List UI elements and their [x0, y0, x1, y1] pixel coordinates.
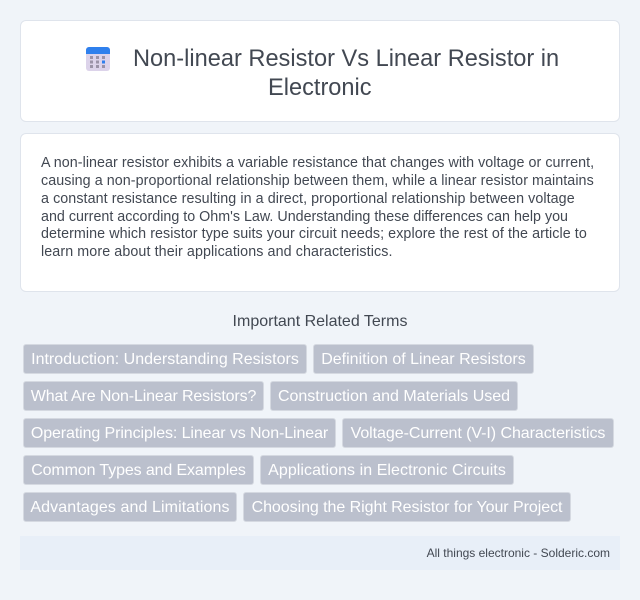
tag: [23, 418, 336, 448]
tag list: [23, 344, 614, 522]
description text: learn more about their applications and characteristics.: [41, 244, 393, 260]
tag: What Are Non-Linear Resistors?: [31, 388, 256, 405]
tag: Choosing the Right Resistor for Your Project: [252, 499, 562, 516]
description text: causing a non-proportional relationship between them, while a linear resistor maintains: [41, 173, 594, 189]
description text: and current according to Ohm's Law. Understanding these differences can help you: [41, 209, 568, 225]
tag: Applications in Electronic Circuits: [268, 462, 506, 479]
description text: [41, 155, 594, 260]
footer credit: All things electronic - Solderic.com: [427, 546, 610, 560]
description text: determine which resistor type suits your circuit needs; explore the rest of the article to: [41, 226, 587, 242]
tag: Definition of Linear Resistors: [321, 351, 526, 368]
title: [133, 46, 559, 101]
title: Electronic: [268, 75, 372, 101]
tag: [313, 344, 534, 374]
footer: [20, 536, 620, 570]
panel: title card: [20, 20, 620, 122]
tag: Construction and Materials Used: [278, 388, 510, 405]
tag: [260, 455, 514, 485]
panel: description: [20, 133, 620, 292]
tag: [342, 418, 614, 448]
title: Non-linear Resistor Vs Linear Resistor in: [133, 46, 559, 72]
tag: Introduction: Understanding Resistors: [31, 351, 299, 368]
description text: a constant resistance resulting in a direct, proportional relationship between voltage: [41, 191, 575, 207]
tag: Voltage-Current (V-I) Characteristics: [351, 425, 605, 442]
description text: A non-linear resistor exhibits a variable resistance that changes with voltage or current,: [41, 155, 594, 171]
tag: [243, 492, 571, 522]
tag: [23, 381, 264, 411]
heading: related terms: Important Related Terms: [233, 313, 407, 330]
tag: [270, 381, 518, 411]
tag: [23, 492, 237, 522]
tag: [23, 344, 307, 374]
tag: Operating Principles: Linear vs Non-Linear: [31, 425, 328, 442]
tag: Advantages and Limitations: [30, 499, 230, 516]
icon: calendar: [86, 47, 110, 71]
tag: Common Types and Examples: [31, 462, 246, 479]
tag: [23, 455, 254, 485]
